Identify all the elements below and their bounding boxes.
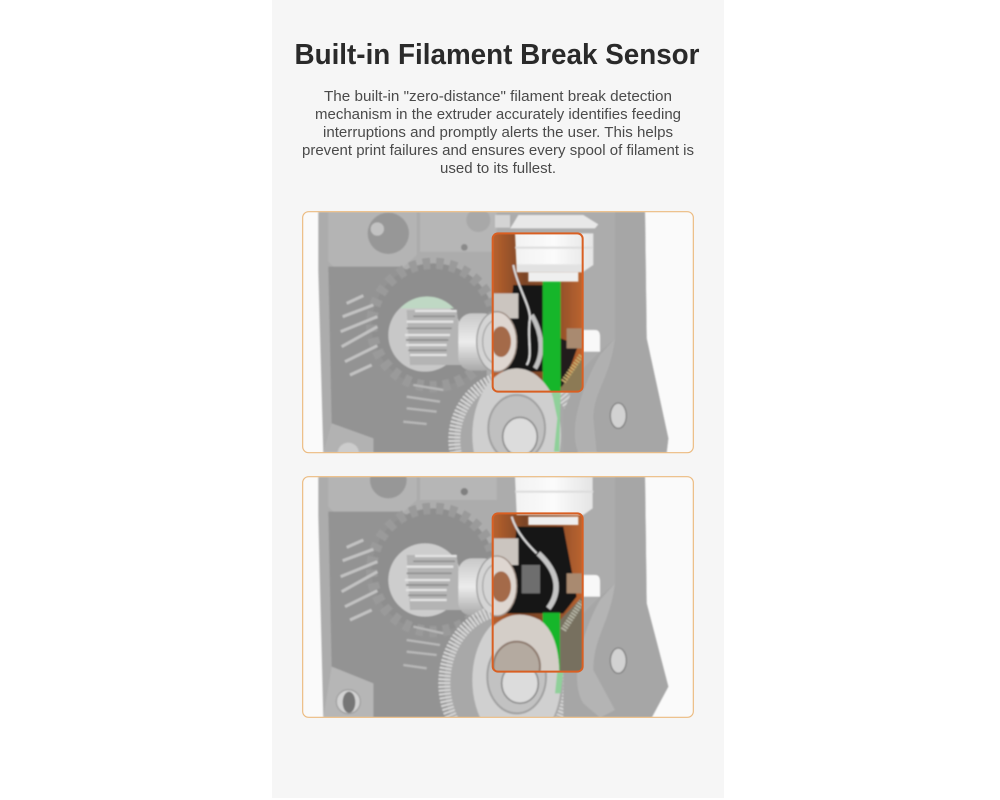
lower green filament (555, 672, 563, 693)
description text (302, 89, 694, 177)
upper block with bore (368, 212, 510, 254)
panel border (303, 477, 693, 717)
screw boss (337, 442, 360, 452)
panel border (303, 212, 693, 453)
title: Built-in Filament Break Sensor (294, 39, 700, 71)
left gear teeth highlights (341, 540, 377, 620)
panel: filament run out (302, 476, 694, 718)
highlighted cut-away (494, 514, 582, 671)
large rear gear (388, 503, 492, 618)
lower green filament (552, 392, 561, 452)
dark gear recess (328, 512, 487, 718)
highlight border (493, 513, 583, 672)
description text: interruptions and promptly alerts the user. This helps (323, 125, 673, 141)
screw boss (323, 667, 373, 718)
white feed cap (515, 477, 593, 525)
highlighted cut-away (494, 234, 582, 391)
description text: used to its fullest. (440, 161, 556, 177)
panel: filament present (302, 211, 694, 454)
description text: The built-in "zero-distance" filament break detection (324, 89, 672, 105)
highlight border (493, 233, 583, 392)
white feed cap (510, 215, 598, 282)
front gear (438, 608, 564, 717)
large rear gear (388, 258, 492, 372)
bearing (458, 312, 492, 371)
extruder body (318, 477, 616, 716)
description text: mechanism in the extruder accurately identifies feeding (315, 107, 681, 123)
upper block with bore (370, 477, 496, 499)
description text: prevent print failures and ensures every spool of filament is (302, 143, 694, 159)
dark gear recess (328, 267, 487, 453)
bearing (458, 556, 492, 616)
right lever arm (563, 212, 668, 453)
pinion (405, 555, 463, 610)
front gear (448, 374, 570, 452)
background column (272, 0, 724, 798)
extruder body (318, 212, 616, 452)
right lever arm (562, 492, 655, 717)
left gear teeth highlights (341, 296, 377, 375)
pinion (405, 310, 463, 365)
